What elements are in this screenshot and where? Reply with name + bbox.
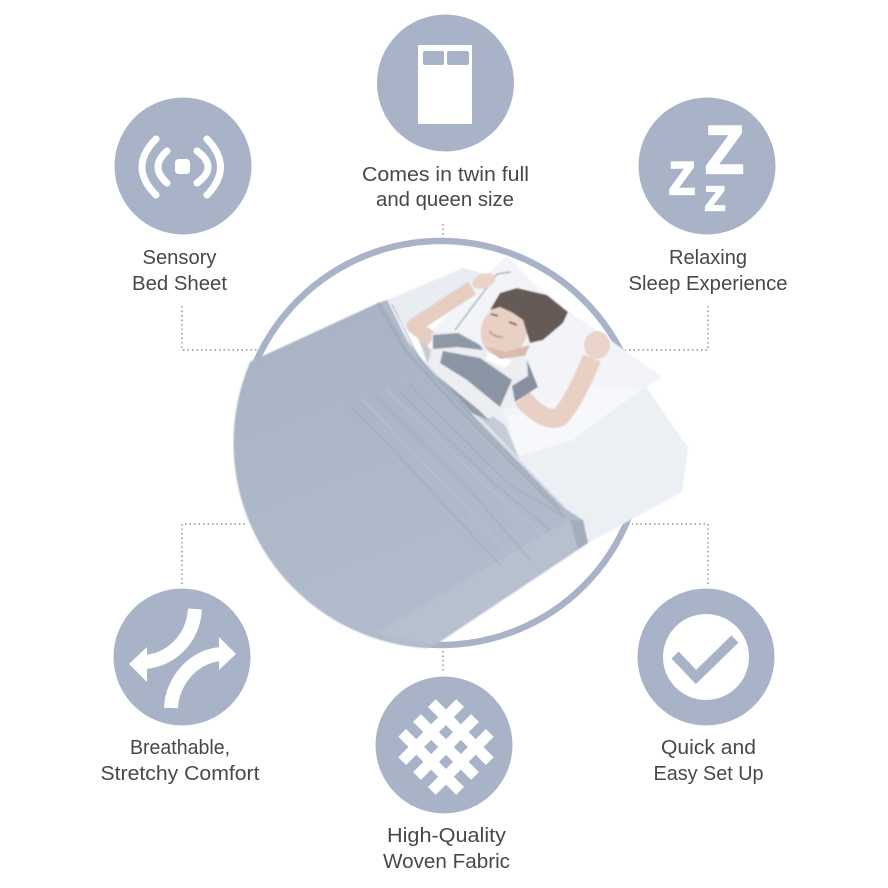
label: relaxing: Sleep Experience	[628, 273, 788, 295]
label: size: Comes in twin full	[362, 164, 529, 186]
icon: check mark	[638, 588, 774, 726]
label: breathable: Breathable,	[130, 737, 230, 759]
front pillow	[507, 385, 640, 457]
label: woven	[383, 825, 510, 873]
mattress	[480, 360, 688, 543]
icon: zzz: Z	[705, 180, 725, 217]
label: size: and queen size	[376, 189, 514, 211]
face	[474, 299, 534, 363]
icon: zzz: Z	[669, 153, 695, 204]
shirt	[423, 332, 538, 421]
dotted connector lines	[182, 224, 708, 672]
label: quick setup: Easy Set Up	[654, 763, 764, 785]
icon: stretch arrows	[114, 588, 250, 726]
pillow piping	[455, 272, 511, 330]
icon: zzz	[638, 98, 776, 234]
body shadow area	[415, 330, 520, 460]
label: sensory: Sensory	[142, 247, 216, 269]
label: breathable: Stretchy Comfort	[100, 763, 260, 785]
label: quick setup	[654, 737, 764, 785]
ear and neck	[484, 345, 530, 359]
label: relaxing	[628, 247, 788, 295]
label: relaxing: Relaxing	[669, 247, 747, 269]
eyes and mouth	[489, 314, 517, 337]
label: size	[362, 164, 529, 211]
left arm	[414, 270, 498, 340]
photo: boy on bed with sensory sheet	[232, 254, 688, 649]
label: woven: Woven Fabric	[383, 851, 510, 873]
left pillow bolster	[387, 268, 500, 330]
label: sensory: Bed Sheet	[132, 273, 227, 295]
sheet side panel	[377, 520, 588, 645]
central ring	[239, 241, 643, 645]
icon: woven fabric	[376, 676, 512, 814]
icon: sensory waves	[114, 98, 252, 234]
sheet	[232, 300, 588, 649]
sheet folds	[377, 302, 564, 565]
label: sensory	[132, 247, 227, 295]
label: breathable	[100, 737, 260, 785]
icon: bed	[377, 14, 514, 152]
icon: zzz: Z	[705, 112, 744, 188]
right arm	[522, 331, 610, 418]
label: woven: High-Quality	[387, 825, 506, 847]
label: quick setup: Quick and	[661, 737, 756, 759]
back pillow	[430, 255, 662, 440]
hair	[490, 288, 568, 343]
